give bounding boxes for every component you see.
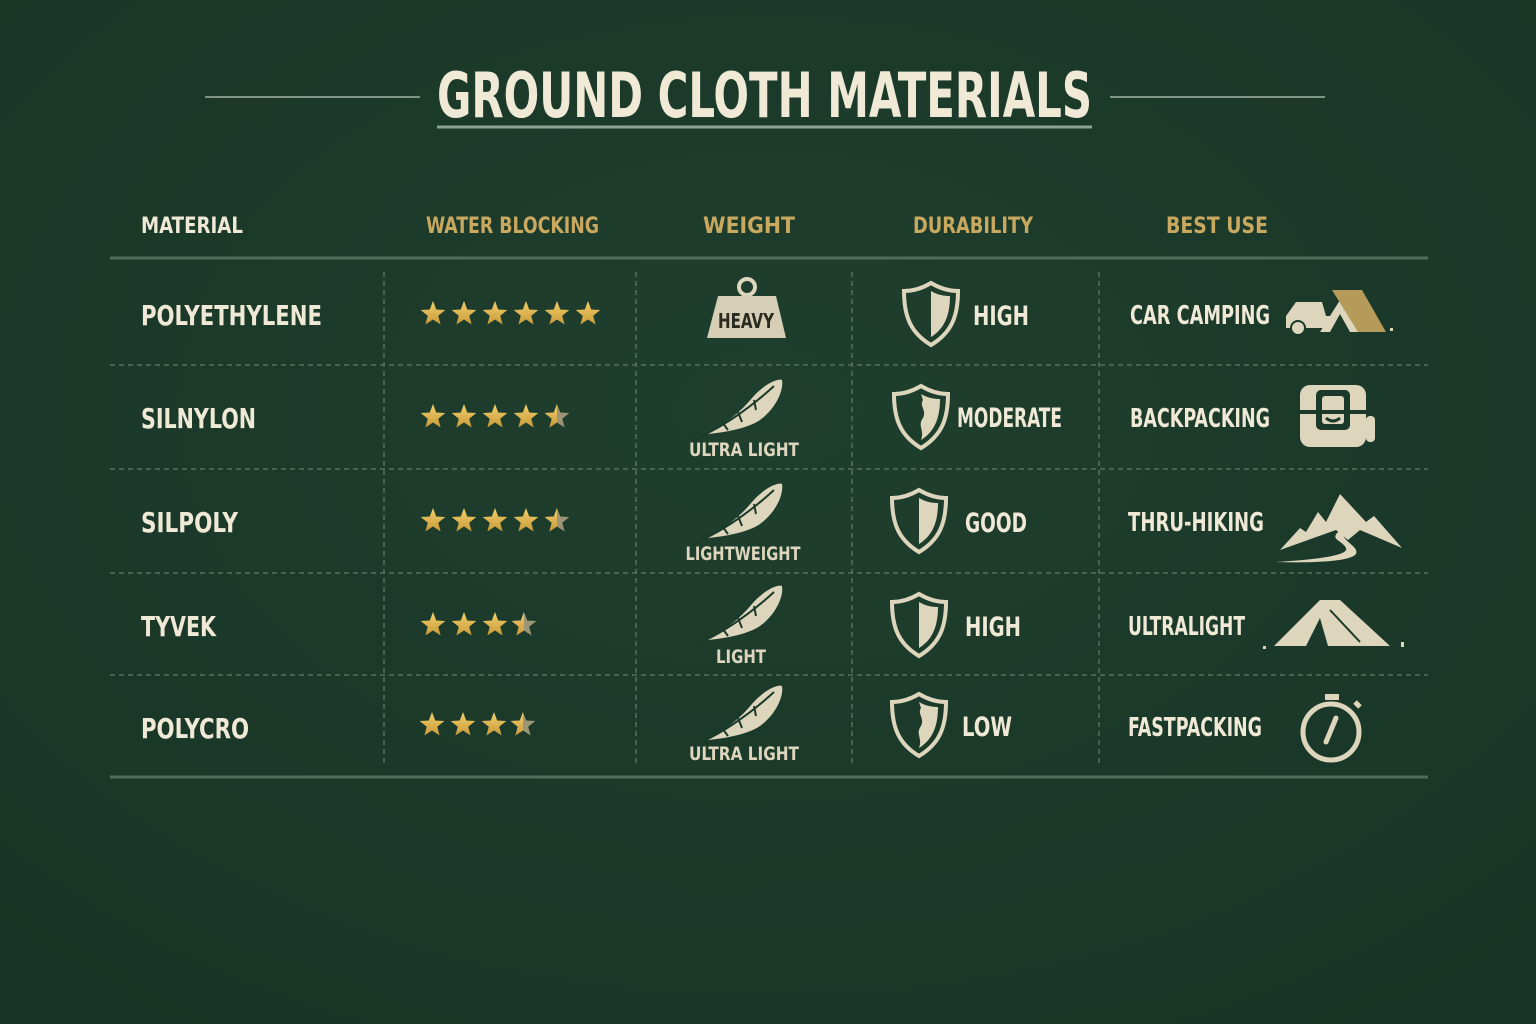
- material names: SILPOLY: [141, 506, 239, 539]
- icon: feather lightweight: [686, 484, 801, 565]
- icon: feather ultra light 2: [689, 686, 799, 765]
- icon: car and tent: [1286, 290, 1393, 335]
- material names: TYVEK: [141, 610, 217, 643]
- icon: feather light: LIGHT: [716, 646, 766, 668]
- table header: [141, 214, 1268, 239]
- icon: feather light: [692, 586, 782, 668]
- icon: mountain trail: [1276, 494, 1402, 562]
- title: GROUND CLOTH MATERIALS: [437, 59, 1092, 132]
- icon: tent: [1263, 600, 1404, 649]
- durability column: MODERATE: [957, 403, 1062, 434]
- durability column: HIGH: [973, 301, 1029, 332]
- icon: feather ultra light: ULTRA LIGHT: [689, 439, 799, 461]
- durability column: GOOD: [965, 508, 1027, 539]
- table header: BEST USE: [1166, 214, 1268, 239]
- icon: kettlebell heavy: [707, 279, 786, 338]
- best use column: THRU-HIKING: [1128, 508, 1264, 538]
- material names: POLYCRO: [141, 712, 249, 745]
- best use column: ULTRALIGHT: [1128, 612, 1245, 642]
- weight column: [686, 279, 801, 765]
- icon: feather ultra light: [689, 380, 799, 461]
- durability column: LOW: [962, 712, 1012, 743]
- material names: [141, 299, 322, 745]
- best use column: [1128, 290, 1404, 760]
- table header: WEIGHT: [703, 214, 796, 239]
- material names: POLYETHYLENE: [141, 299, 322, 332]
- durability column: HIGH: [965, 612, 1021, 643]
- icon: feather ultra light 2: ULTRA LIGHT: [689, 743, 799, 765]
- table header: WATER BLOCKING: [426, 214, 599, 239]
- icon: backpack: [1298, 385, 1375, 447]
- table grid: [110, 258, 1428, 777]
- table header: DURABILITY: [913, 214, 1034, 239]
- icon: kettlebell heavy: HEAVY: [718, 309, 775, 333]
- durability column: [892, 283, 1062, 756]
- best use column: FASTPACKING: [1128, 713, 1262, 743]
- table header: MATERIAL: [141, 214, 243, 239]
- best use column: BACKPACKING: [1130, 404, 1270, 434]
- icon: stopwatch: [1303, 694, 1360, 760]
- water blocking stars: [420, 301, 600, 736]
- best use column: CAR CAMPING: [1130, 301, 1270, 331]
- material names: SILNYLON: [141, 402, 256, 435]
- icon: feather lightweight: LIGHTWEIGHT: [686, 543, 801, 565]
